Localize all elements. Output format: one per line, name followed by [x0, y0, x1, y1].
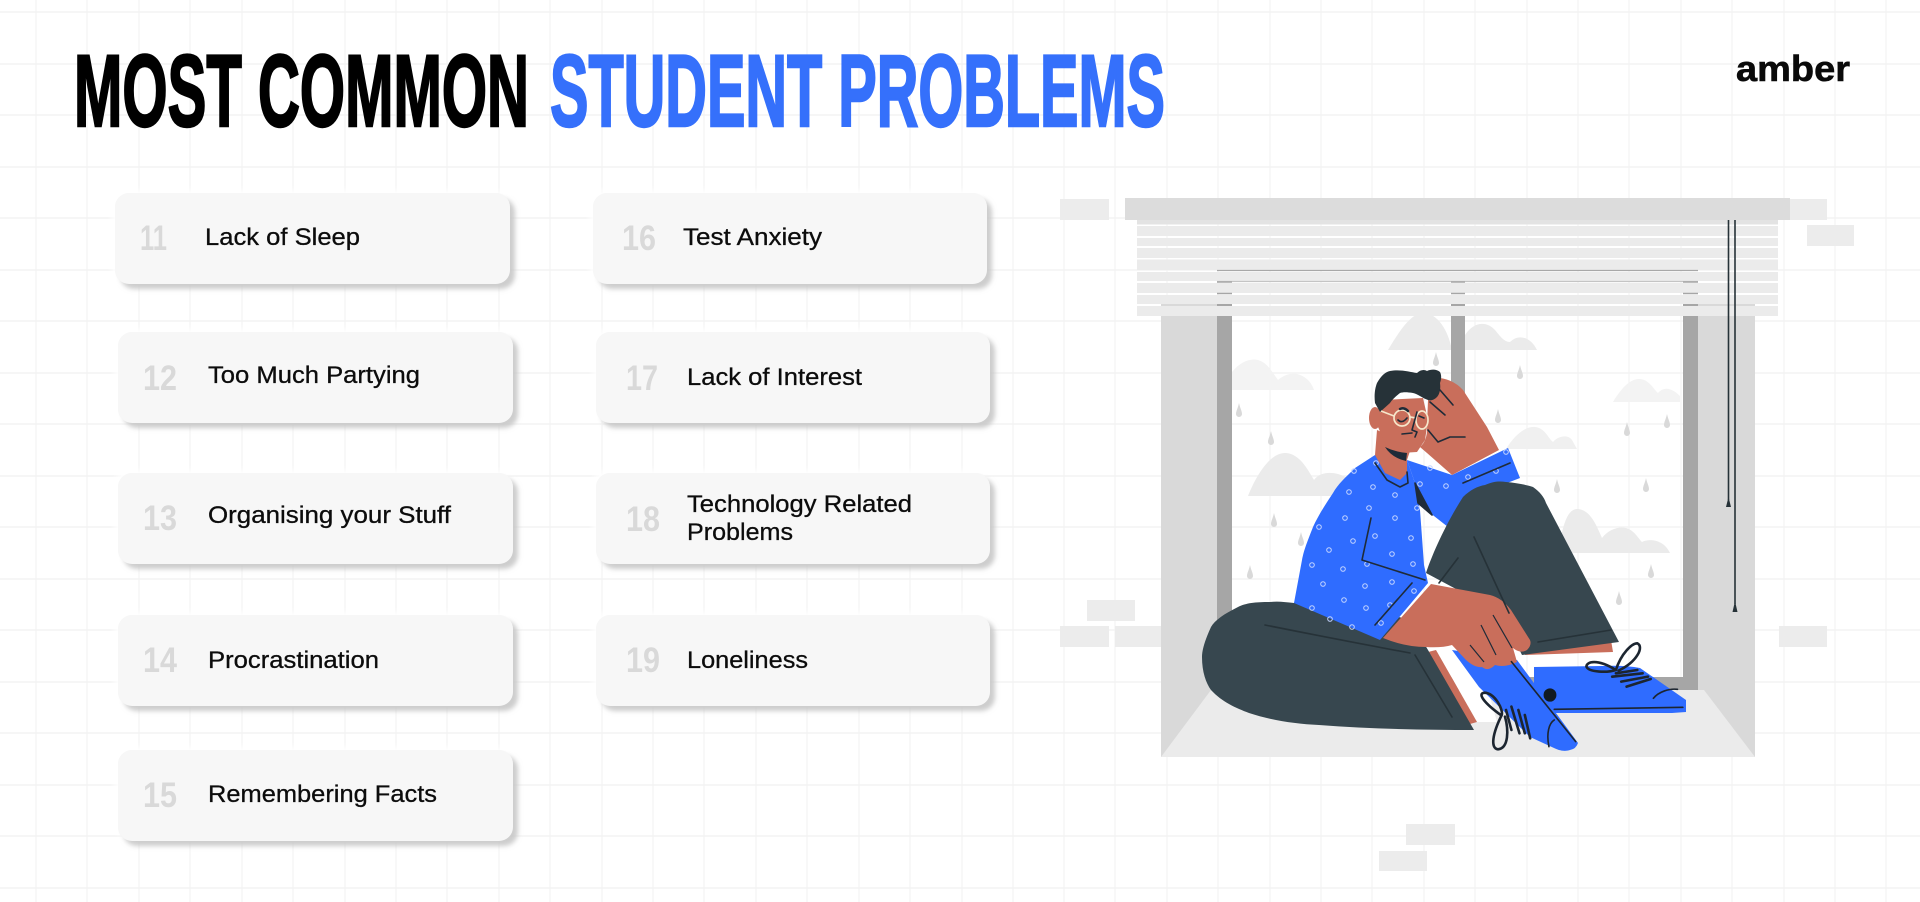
blinds — [1137, 220, 1778, 316]
shirt body — [1294, 455, 1428, 640]
clouds — [1232, 313, 1680, 553]
ear — [1369, 407, 1381, 429]
card: 13 Organising your Stuff: Organising your Stuff — [208, 502, 451, 529]
rain drops — [1236, 352, 1670, 605]
lower leg — [1202, 590, 1474, 730]
trouser details — [1265, 537, 1611, 717]
card: 11 Lack of Sleep: Lack of Sleep — [205, 224, 360, 251]
raised knee — [1426, 481, 1619, 655]
illustration: student sitting in window — [1060, 198, 1854, 871]
card: 17 Lack of Interest — [596, 332, 990, 423]
title: STUDENT PROBLEMS — [550, 34, 1165, 148]
window frame — [1161, 300, 1755, 757]
card: 19 Loneliness: 19 — [626, 641, 660, 680]
card: 17 Lack of Interest: Lack of Interest — [687, 364, 862, 391]
shin skin — [1525, 640, 1613, 655]
shirt arm — [1407, 448, 1520, 527]
neck — [1375, 430, 1412, 480]
dots on shirt — [1310, 450, 1508, 629]
card: 14 Procrastination — [118, 615, 513, 706]
wall bricks — [1060, 199, 1854, 871]
card: 19 Loneliness — [596, 615, 990, 706]
card: 14 Procrastination: 14 — [143, 641, 177, 680]
hair — [1375, 370, 1441, 412]
raised hand — [1420, 378, 1499, 475]
card: 18 Technology Related Problems: Technology Related — [687, 491, 912, 518]
card: 11 Lack of Sleep: 11 — [140, 219, 167, 258]
window mullion — [1451, 300, 1465, 460]
logo: amber: amber — [1736, 48, 1850, 89]
card: 15 Remembering Facts — [118, 750, 513, 841]
finger lines — [1470, 615, 1512, 662]
card: 18 Technology Related Problems — [596, 473, 990, 564]
card: 12 Too Much Partying: 12 — [143, 359, 177, 398]
person — [1202, 370, 1686, 751]
card: 12 Too Much Partying: Too Much Partying — [208, 362, 420, 389]
blind cords — [1726, 220, 1738, 612]
shirt details — [1362, 463, 1510, 625]
shoe details and laces — [1481, 643, 1683, 749]
card: 12 Too Much Partying — [118, 332, 513, 423]
title: MOST COMMON — [74, 34, 529, 148]
chin shadow — [1385, 447, 1407, 461]
card: 15 Remembering Facts: 15 — [143, 776, 177, 815]
back shoe — [1534, 666, 1686, 713]
card: 16 Test Anxiety: 16 — [622, 219, 656, 258]
card: 14 Procrastination: Procrastination — [208, 647, 379, 674]
card: 19 Loneliness: Loneliness — [687, 647, 808, 674]
window sill — [1161, 690, 1755, 757]
card: 17 Lack of Interest: 17 — [626, 359, 658, 398]
card: 18 Technology Related Problems: Problems — [687, 519, 793, 546]
card: 16 Test Anxiety: Test Anxiety — [683, 224, 822, 251]
glasses — [1381, 410, 1428, 429]
face details — [1398, 390, 1465, 442]
card: 18 Technology Related Problems: 18 — [626, 500, 660, 539]
white sock gap — [1436, 650, 1497, 722]
lower hand — [1383, 584, 1531, 669]
card: 13 Organising your Stuff — [118, 473, 513, 564]
card: 11 Lack of Sleep — [115, 193, 510, 284]
card: 13 Organising your Stuff: 13 — [143, 499, 177, 538]
back leg stripe — [1428, 650, 1477, 724]
top rail — [1125, 198, 1790, 220]
card: 16 Test Anxiety — [593, 193, 987, 284]
card: 15 Remembering Facts: Remembering Facts — [208, 781, 437, 808]
front shoe — [1452, 650, 1578, 751]
face — [1378, 398, 1428, 453]
